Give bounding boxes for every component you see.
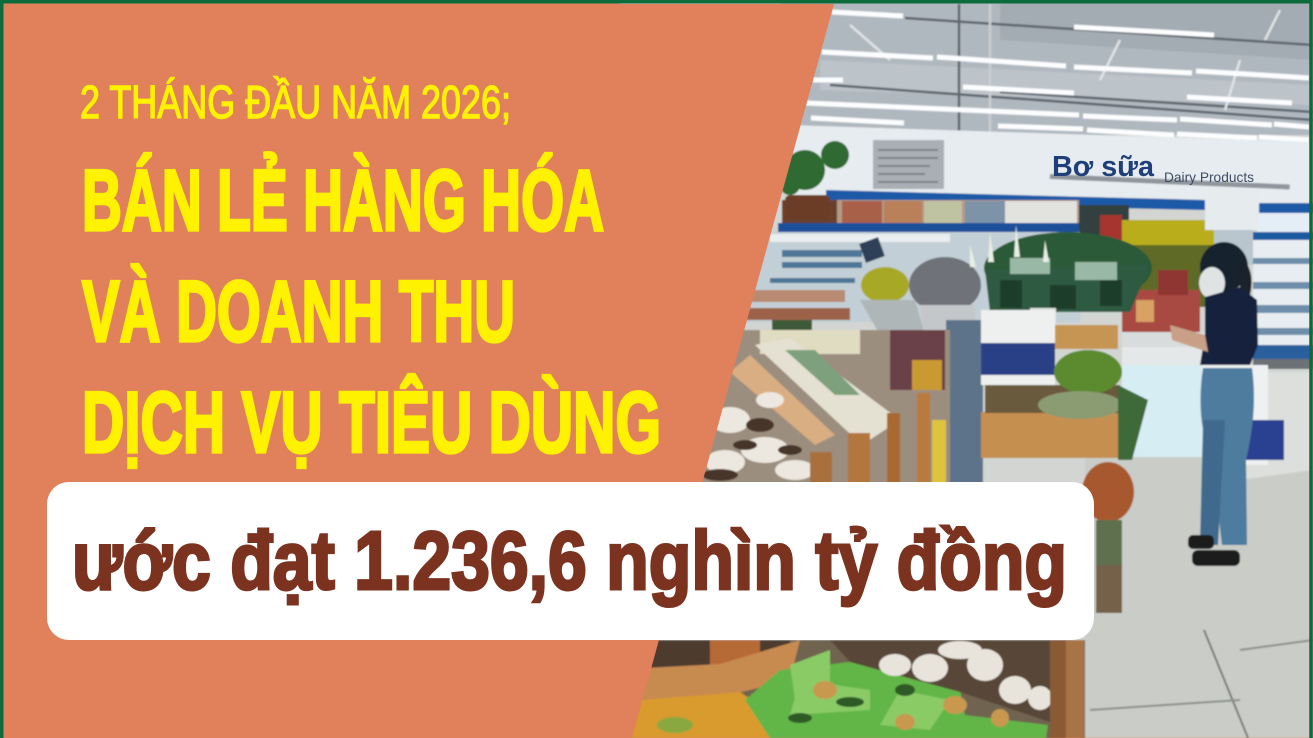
flowers lower: [1082, 462, 1134, 522]
back shelves: [730, 232, 1080, 322]
wall: [790, 125, 1313, 205]
floor: [1085, 372, 1313, 738]
bottom fresh produce: [630, 640, 1085, 738]
photo strip: [782, 200, 1079, 224]
callout: headline figure: ước đạt 1.236,6 nghìn tỷ đồng: [72, 514, 1067, 607]
main title: VÀ DOANH THU: [82, 264, 515, 360]
tree: [780, 141, 849, 195]
food tags and mushrooms left: [700, 330, 950, 485]
basket: [1240, 420, 1284, 460]
shelf sign: dairy products: [1052, 151, 1254, 185]
flowers: [909, 257, 981, 313]
shelf sign: dairy products: Dairy Products: [1164, 169, 1254, 185]
main title: [82, 153, 661, 471]
supermarket photo background: [620, 0, 1313, 738]
wooden boxes: [1055, 325, 1118, 349]
plants: [1054, 350, 1122, 394]
red product shelf: [1122, 290, 1200, 332]
gray blue column: [946, 320, 983, 485]
sign and panels: [1257, 213, 1313, 233]
green yellow wall: [1122, 220, 1214, 245]
top blue band: [826, 190, 1205, 210]
subtitle: 2 THÁNG ĐẦU NĂM 2026;: [80, 76, 511, 128]
main title: BÁN LẺ HÀNG HÓA: [82, 153, 604, 249]
promo card: [981, 310, 1055, 385]
shopper: [1200, 242, 1248, 292]
orange diagonal panel: [4, 4, 834, 738]
shelf sign: dairy products: Bơ sữa: [1052, 151, 1155, 183]
freezer: [1122, 347, 1207, 365]
callout: headline figure: [47, 482, 1094, 640]
ceiling: [780, 0, 1313, 135]
main title: DỊCH VỤ TIÊU DÙNG: [82, 375, 661, 471]
